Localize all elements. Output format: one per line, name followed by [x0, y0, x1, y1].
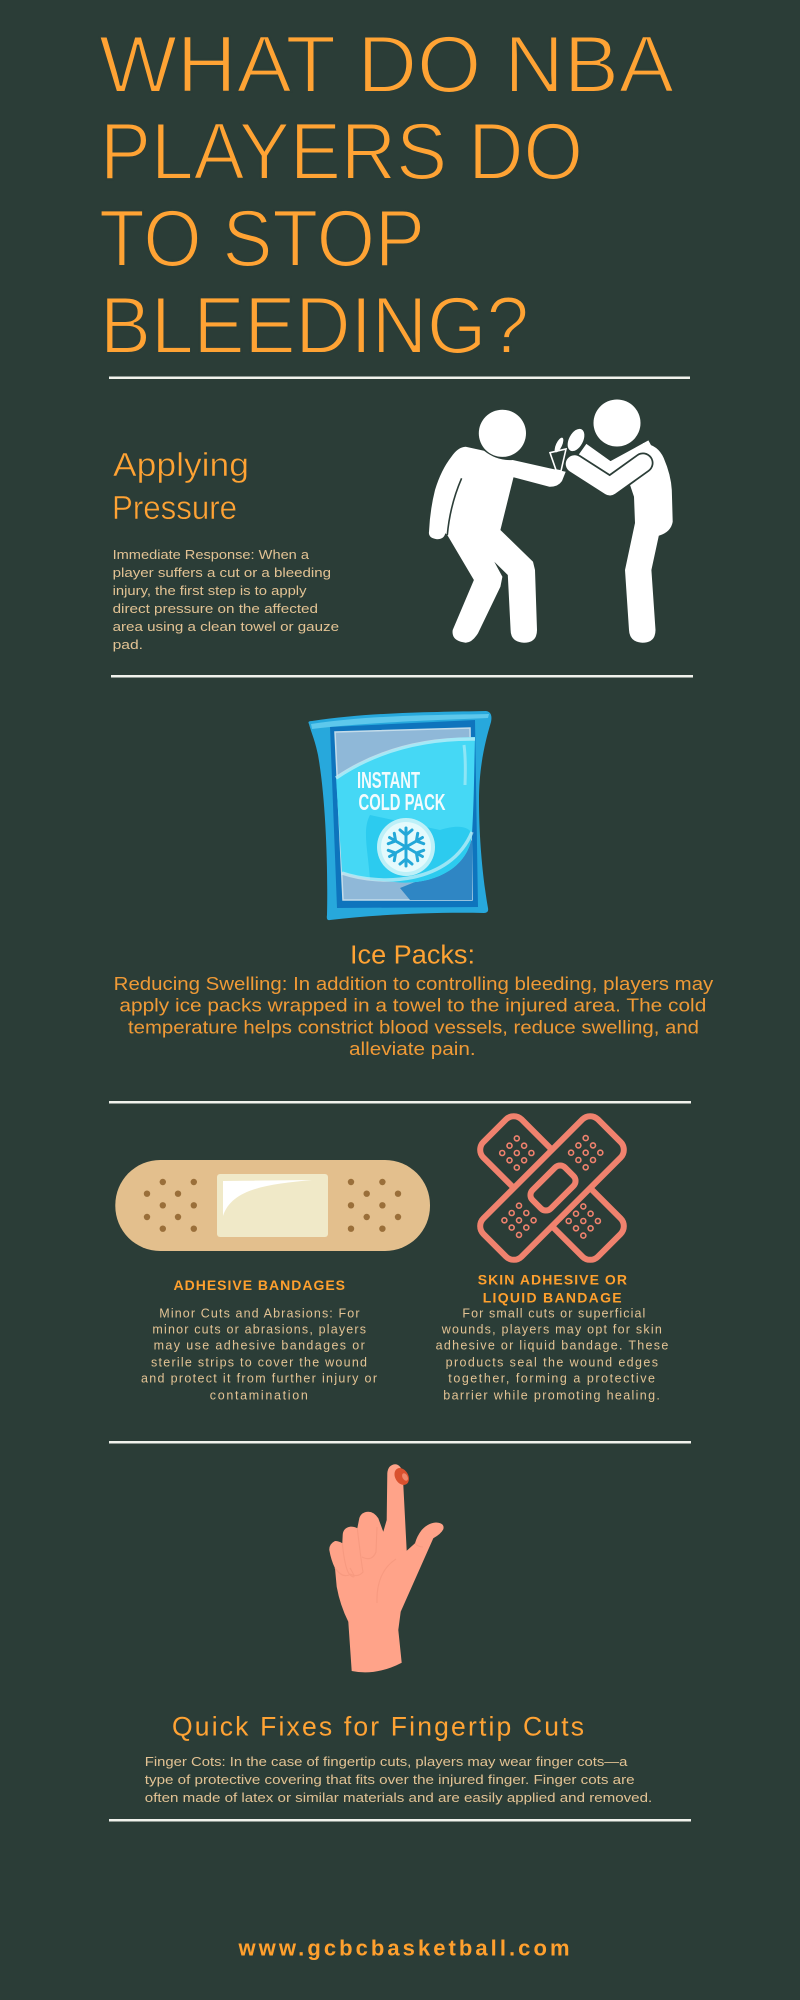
- text block: minor cuts: Minor Cuts and Abrasions: For: [159, 1306, 360, 1320]
- icon: hand with cut fingertip: [329, 1464, 444, 1672]
- title: BLEEDING?: [100, 281, 529, 371]
- panel: skin adhesive or liquid bandage: [436, 1112, 668, 1402]
- icon: crossed bandages: [476, 1112, 628, 1264]
- panel: applying pressure: [112, 400, 673, 652]
- title: PLAYERS DO: [100, 107, 583, 197]
- text block: minor cuts: minor cuts or abrasions, players: [152, 1322, 366, 1336]
- text block: finger cots: type of protective covering that fits over the injured finger. Finger cots are: [145, 1772, 635, 1787]
- text block: small cuts: For small cuts or superficial: [462, 1306, 645, 1320]
- text block: reducing swelling: Reducing Swelling: In addition to controlling bleeding, players may: [114, 973, 714, 994]
- text block: reducing swelling: [114, 973, 714, 1059]
- text block: small cuts: wounds, players may opt for skin: [441, 1322, 662, 1336]
- text block: immediate response: pad.: [113, 637, 143, 652]
- heading: applying pressure: [112, 446, 249, 526]
- panel: adhesive bandages: [115, 1160, 430, 1402]
- text block: minor cuts: and protect it from further injury or: [141, 1372, 377, 1386]
- text block: minor cuts: sterile strips to cover the wound: [151, 1355, 367, 1369]
- heading: skin adhesive or liquid bandage: LIQUID BANDAGE: [483, 1289, 622, 1305]
- text block: minor cuts: contamination: [210, 1388, 308, 1402]
- panel: fingertip cuts: [145, 1464, 652, 1805]
- title: TO STOP: [99, 194, 425, 284]
- icon: instant cold pack: COLD PACK: [358, 789, 446, 815]
- footer url: www.gcbcbasketball.com: [238, 1935, 570, 1960]
- text block: small cuts: together, forming a protective: [448, 1372, 655, 1386]
- text block: finger cots: Finger Cots: In the case of fingertip cuts, players may wear finger cots—a: [145, 1754, 628, 1769]
- text block: immediate response: injury, the first step is to apply: [113, 583, 307, 598]
- icon: two figures applying pressure: [429, 400, 673, 643]
- title: WHAT DO NBA: [99, 20, 674, 110]
- text block: immediate response: [113, 547, 339, 652]
- text block: reducing swelling: alleviate pain.: [349, 1038, 476, 1059]
- text block: immediate response: direct pressure on the affected: [113, 601, 318, 616]
- title: [99, 20, 674, 371]
- text block: immediate response: area using a clean towel or gauze: [113, 619, 339, 634]
- text block: reducing swelling: apply ice packs wrapped in a towel to the injured area. The cold: [119, 995, 706, 1016]
- text block: small cuts: products seal the wound edges: [446, 1355, 658, 1369]
- icon: instant cold pack: [308, 711, 491, 920]
- text block: minor cuts: [141, 1306, 377, 1402]
- heading: applying pressure: Pressure: [112, 489, 237, 526]
- text block: immediate response: Immediate Response: When a: [113, 547, 310, 562]
- icon: adhesive bandage: [115, 1160, 430, 1251]
- heading: ice packs: Ice Packs:: [350, 941, 475, 969]
- text block: small cuts: [436, 1306, 668, 1402]
- text block: finger cots: [145, 1754, 652, 1805]
- text block: finger cots: often made of latex or similar materials and are easily applied and removed.: [145, 1790, 652, 1805]
- heading: skin adhesive or liquid bandage: [478, 1271, 627, 1305]
- heading: skin adhesive or liquid bandage: SKIN ADHESIVE OR: [478, 1271, 627, 1287]
- heading: quick fixes for fingertip cuts: Quick Fixes for Fingertip Cuts: [172, 1712, 584, 1742]
- panel: ice packs: [114, 711, 714, 1059]
- heading: applying pressure: Applying: [113, 446, 249, 483]
- heading: adhesive bandages: ADHESIVE BANDAGES: [174, 1277, 345, 1293]
- text block: immediate response: player suffers a cut or a bleeding: [113, 565, 331, 580]
- text block: reducing swelling: temperature helps constrict blood vessels, reduce swelling, and: [128, 1016, 699, 1037]
- text block: small cuts: barrier while promoting healing.: [443, 1388, 660, 1402]
- text block: minor cuts: may use adhesive bandages or: [154, 1339, 365, 1353]
- text block: small cuts: adhesive or liquid bandage. These: [436, 1339, 668, 1353]
- icon: instant cold pack: INSTANT: [357, 767, 420, 793]
